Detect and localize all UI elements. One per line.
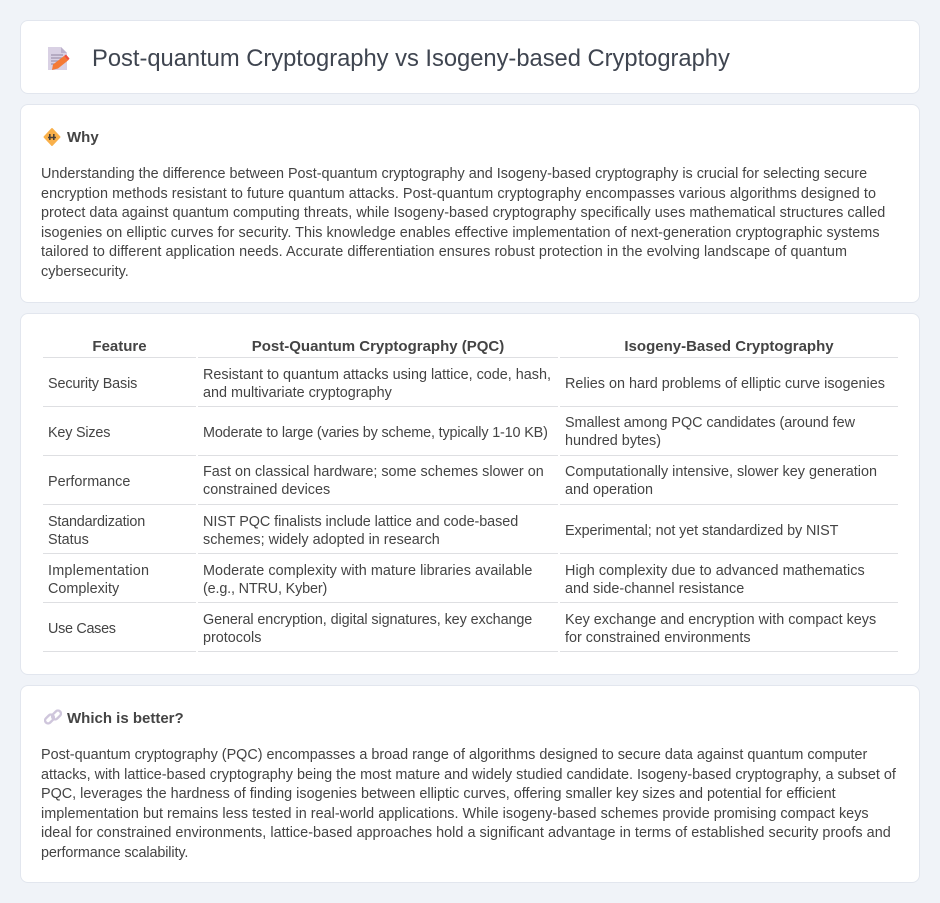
text block: verdict: implementation but remains less tested in real-world applications. While isogeny-based schemes provide promising compact keys (41, 806, 869, 822)
row: security basis (48, 367, 885, 401)
row: performance: Computationally intensive, slower key generation (565, 464, 877, 480)
heading: why: Why (67, 129, 99, 146)
panel: comparison table (20, 313, 920, 675)
table header: isogeny-based cryptography: Isogeny-Based Cryptography (624, 338, 834, 355)
row: standardization status: NIST PQC finalists include lattice and code-based (203, 514, 518, 530)
row: performance: Fast on classical hardware; some schemes slower on (203, 464, 544, 480)
text block: why explanation: Understanding the difference between Post-quantum cryptography and Isogeny-based cryptography is crucial for selecting secure (41, 166, 867, 182)
row: standardization status: Experimental; not yet standardized by NIST (565, 523, 838, 539)
text block: verdict: Post-quantum cryptography (PQC) encompasses a broad range of algorithms designed to secure data against quantum computer (41, 747, 867, 763)
row: performance: Performance (48, 474, 130, 490)
icon: chain link (44, 709, 62, 725)
row: security basis: Security Basis (48, 376, 137, 392)
title: Post-quantum Cryptography vs Isogeny-based Cryptography (92, 45, 730, 72)
row: implementation complexity: Implementation (48, 563, 149, 579)
text block: verdict: attacks, with lattice-based cryptography being the most mature and widely studied candidate. Isogeny-based cryptography, a subset of (41, 767, 896, 783)
text block: verdict: ideal for constrained environments, lattice-based approaches hold a significant advantage in terms of established security proofs and (41, 825, 891, 841)
text block: why explanation: tailored to different application needs. Accurate differentiation ensures robust protection in the evolving landscape of quantum (41, 244, 847, 260)
row: implementation complexity: and side-channel resistance (565, 581, 744, 597)
row: implementation complexity: High complexity due to advanced mathematics (565, 563, 865, 579)
text block: why explanation: cybersecurity. (41, 264, 129, 280)
table header: feature: Feature (92, 338, 147, 355)
panel: why (20, 104, 920, 303)
icon: warning diamond (44, 128, 60, 146)
text block: verdict: PQC, leverages the hardness of finding isogenies between elliptic curves, offering smaller key sizes and potential for efficient (41, 786, 836, 802)
row: use cases (48, 612, 876, 646)
text block: verdict (41, 747, 896, 861)
row: standardization status: schemes; widely adopted in research (203, 532, 440, 548)
icon: document with pencil (48, 47, 70, 70)
row: use cases: General encryption, digital signatures, key exchange (203, 612, 532, 628)
text block: verdict: performance scalability. (41, 845, 188, 861)
row: implementation complexity: (e.g., NTRU, Kyber) (203, 581, 327, 597)
text block: why explanation (41, 166, 885, 280)
panel: title header (20, 20, 920, 94)
text block: why explanation: isogenies on elliptic curves for security. This knowledge enables effective implementation of next-generation cryptographic systems (41, 225, 880, 241)
row: standardization status: Standardization (48, 514, 145, 530)
row: standardization status (48, 514, 838, 548)
row: performance: constrained devices (203, 482, 330, 498)
text block: why explanation: encryption methods resistant to future quantum attacks. Post-quantum cryptography encompasses various algorithms designed to (41, 186, 876, 202)
row: implementation complexity: Complexity (48, 581, 119, 597)
text block: why explanation: protect data against quantum computing threats, while Isogeny-based cryptography specifically uses mathematical structures called (41, 205, 885, 221)
row: key sizes: Key Sizes (48, 425, 110, 441)
row: standardization status: Status (48, 532, 89, 548)
row: security basis: Relies on hard problems of elliptic curve isogenies (565, 376, 885, 392)
row: key sizes (48, 415, 855, 449)
row: security basis: and multivariate cryptography (203, 385, 392, 401)
row: key sizes: hundred bytes) (565, 433, 661, 449)
row: key sizes: Smallest among PQC candidates (around few (565, 415, 855, 431)
row: security basis: Resistant to quantum attacks using lattice, code, hash, (203, 367, 551, 383)
heading: which is better: Which is better? (67, 710, 184, 727)
row: performance: and operation (565, 482, 653, 498)
row: use cases: Use Cases (48, 621, 116, 637)
row: performance (48, 464, 877, 498)
row: implementation complexity: Moderate complexity with mature libraries available (203, 563, 532, 579)
row: implementation complexity (48, 563, 865, 597)
row: key sizes: Moderate to large (varies by scheme, typically 1-10 KB) (203, 425, 548, 441)
row: use cases: protocols (203, 630, 261, 646)
table header: post-quantum cryptography: Post-Quantum Cryptography (PQC) (252, 338, 504, 355)
panel: which is better (20, 685, 920, 883)
row: use cases: for constrained environments (565, 630, 751, 646)
row: use cases: Key exchange and encryption with compact keys (565, 612, 876, 628)
